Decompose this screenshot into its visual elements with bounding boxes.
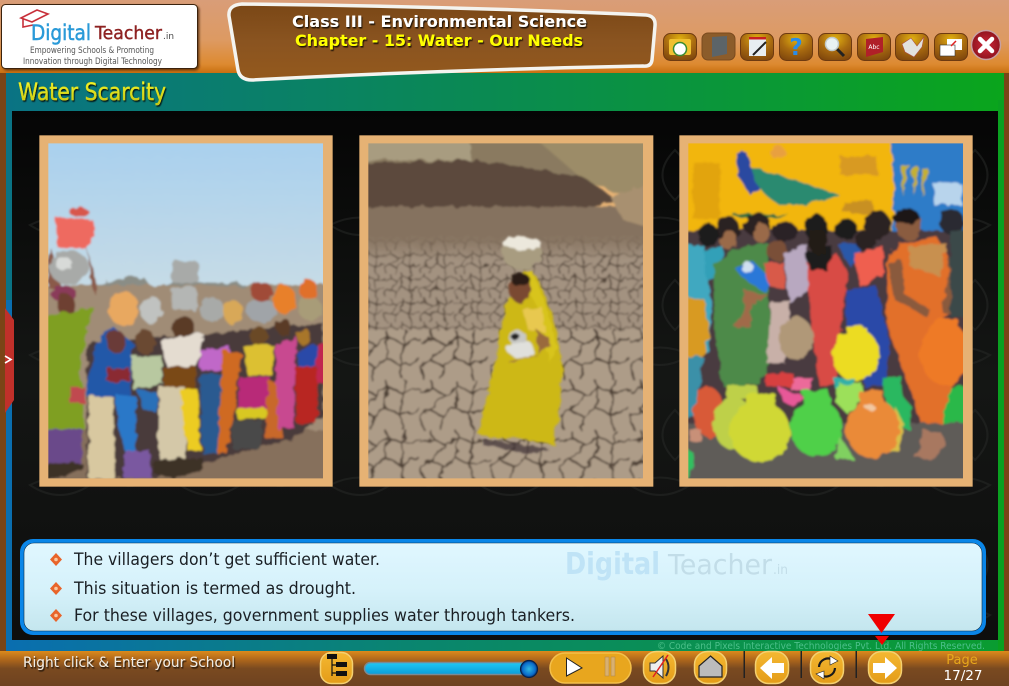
play and pause control [550,653,631,683]
icon: clock folder [664,34,696,60]
bullet text three: For these villages, government supplies water through tankers. [74,606,575,625]
black content panel [12,111,998,640]
divider three [856,651,857,678]
icon: notepad [740,34,774,60]
page label: Page [946,653,978,668]
logo tagline two: Innovation through Digital Technology [23,57,163,67]
logo wordmark second part: Teacher [94,23,163,44]
left side tab [5,308,14,413]
logo wordmark: Digital [31,21,91,45]
notes panel [24,543,982,631]
copyright line: © Code and Pixels Interactive Technologies Pvt. Ltd. All Rights Reserved. [657,641,985,652]
watermark suffix: .in [773,563,788,578]
red pointer arrow [868,614,895,645]
bullet text one: The villagers don’t get sufficient water. [73,550,380,569]
icon: tree menu [320,652,352,684]
photo: crowd at water tanker with plastic pots [677,135,977,487]
photo: woman walking on cracked earth [357,135,657,487]
logo suffix: .in [163,32,174,42]
icon: reference book [702,33,735,60]
icon: back arrow [756,652,788,684]
photo: women carrying pots in a line [37,135,337,487]
divider one [744,651,745,678]
icon: dictionary: Abc [868,44,880,51]
icon: home [694,652,726,684]
watermark word one: Digital [565,547,660,582]
section heading: Water Scarcity [18,78,166,106]
icon: graduation cap [21,10,48,27]
divider two [800,651,802,678]
school prompt: Right click & Enter your School [23,655,235,671]
chevron [5,356,11,363]
icon: open book [896,34,928,60]
header wood bar [0,0,1009,73]
icon: muted speaker [644,652,676,684]
icon: help: ? [789,35,803,61]
footer bar [0,651,1009,686]
title banner [229,4,655,80]
logo card [2,4,198,68]
bullet text two: This situation is termed as drought. [73,579,356,598]
icon: magnifier [818,34,852,60]
icon: refresh [810,652,844,684]
class title: Class III - Environmental Science [292,12,587,31]
icon: window resize [934,34,968,60]
bullet one [50,553,62,566]
icon: forward arrow [868,652,902,684]
bullet two [50,582,62,595]
page number: 17/27 [944,668,982,684]
icon: help [780,34,812,61]
notes panel border [20,539,986,635]
icon: close [972,30,1000,60]
bullet three [50,609,62,622]
logo tagline one: Empowering Schools & Promoting [30,46,154,56]
progress slider [364,660,538,678]
chapter title: Chapter - 15: Water - Our Needs [295,31,583,50]
watermark word two: Teacher [667,548,772,581]
toolbar icons [664,30,1000,61]
icon: dictionary [858,34,890,60]
